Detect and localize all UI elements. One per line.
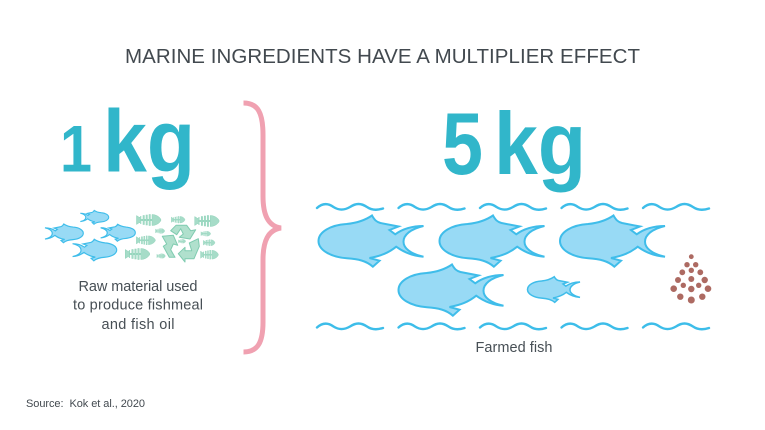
waves: top row xyxy=(317,204,709,210)
text: raw material caption: to produce fishmeal xyxy=(73,298,203,314)
brace xyxy=(244,103,281,352)
title: MARINE INGREDIENTS HAVE A MULTIPLIER EFFECT xyxy=(125,45,640,68)
heading: 5kg: kg xyxy=(494,94,586,193)
heading: 5kg xyxy=(442,94,586,193)
text: raw material caption xyxy=(73,279,203,333)
heading: 1kg xyxy=(60,92,195,191)
heading: 5kg: 5 xyxy=(442,94,483,193)
icon: farmed fish xyxy=(318,216,665,316)
icon: fish bones xyxy=(125,214,219,260)
heading: 1kg: kg xyxy=(103,92,195,191)
heading: 1kg: 1 xyxy=(60,112,92,186)
text: source: Source: Kok et al., 2020 xyxy=(26,398,145,410)
waves: bottom row xyxy=(317,324,709,329)
text: farmed fish caption: Farmed fish xyxy=(476,340,552,356)
icon: feed pellets xyxy=(670,254,711,304)
icon: recycling arrows xyxy=(162,225,199,262)
text: raw material caption: Raw material used xyxy=(78,279,198,295)
text: raw material caption: and fish oil xyxy=(102,317,174,333)
icon: raw material small fish xyxy=(45,210,135,261)
